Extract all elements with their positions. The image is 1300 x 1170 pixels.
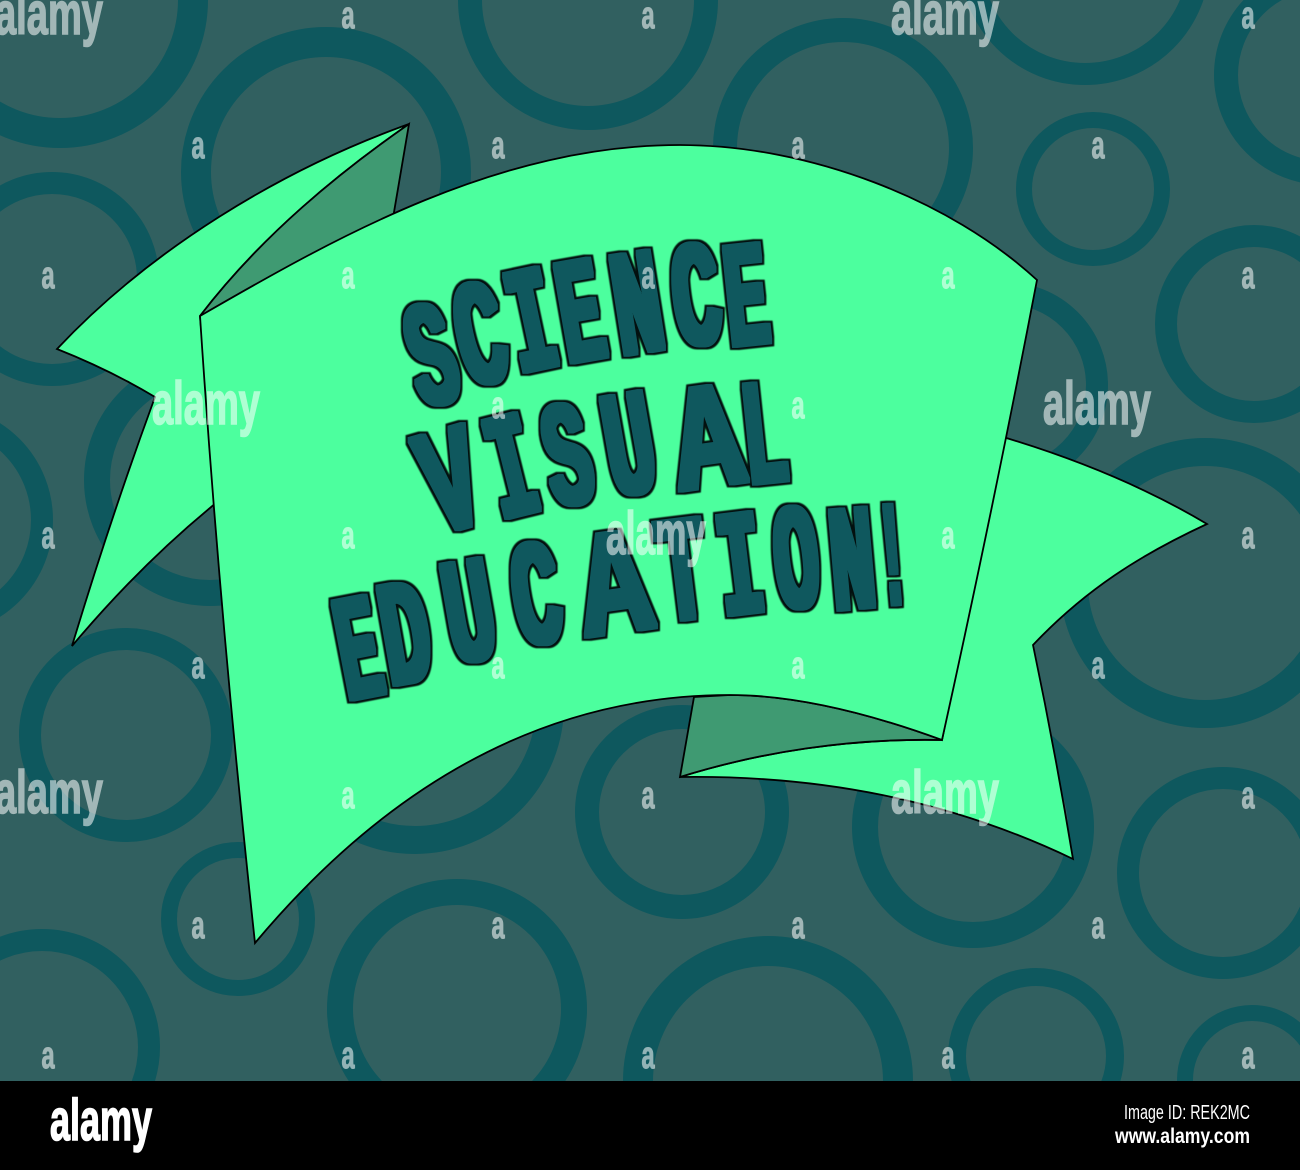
title: Science Visual Education!: A: [663, 358, 754, 536]
footer: alamy logo: alamy: [50, 1088, 152, 1153]
watermark: small repeated letters: a: [191, 123, 205, 166]
watermark: small repeated letters: a: [41, 513, 55, 556]
title: Science Visual Education!: N: [602, 226, 676, 401]
title: Science Visual Education!: A: [569, 504, 662, 682]
watermark: small repeated letters: a: [341, 1033, 355, 1076]
title: Science Visual Education!: [324, 218, 914, 745]
watermark: small repeated letters: a: [641, 773, 655, 816]
watermark: small repeated letters: a: [791, 643, 805, 686]
watermark: small repeated letters: a: [641, 1033, 655, 1076]
footer bar: [0, 1081, 1300, 1170]
title: Science Visual Education!: D: [368, 556, 446, 731]
watermark: small repeated letters: a: [41, 1033, 55, 1076]
title: Science Visual Education!: E: [717, 218, 778, 392]
footer: image id: Image ID: REK2MC: [1124, 1102, 1250, 1124]
footer: website: www.alamy.com: [1114, 1125, 1250, 1148]
watermark: small repeated letters: a: [41, 253, 55, 296]
banner: right back ribbon tail: [680, 437, 1207, 859]
watermark: small repeated letters: a: [491, 123, 505, 166]
banner: main front panel: [200, 145, 1037, 943]
watermark: large repeated wordmarks: alamy: [606, 500, 706, 567]
watermark: small repeated letters: a: [341, 773, 355, 816]
watermark: large repeated wordmarks: alamy: [891, 759, 999, 826]
watermark: small repeated letters: a: [1091, 123, 1105, 166]
watermark: small repeated letters: a: [1091, 643, 1105, 686]
watermark: small repeated letters: a: [791, 383, 805, 426]
watermark: small repeated letters: a: [491, 383, 505, 426]
watermark: small repeated letters: a: [1241, 773, 1255, 816]
watermark: small repeated letters: a: [491, 903, 505, 946]
watermark: small repeated letters: a: [1091, 903, 1105, 946]
title: Science Visual Education!: C: [501, 517, 575, 692]
watermark: small repeated letters: a: [1241, 1033, 1255, 1076]
banner: lower fold shadow: [680, 695, 942, 777]
watermark: large repeated wordmarks: alamy: [152, 370, 260, 437]
watermark: small repeated letters: a: [791, 903, 805, 946]
title: Science Visual Education!: !: [872, 480, 914, 651]
watermark: small repeated letters: a: [191, 903, 205, 946]
title: Science Visual Education!: S: [390, 276, 477, 452]
watermark: small repeated letters: a: [491, 643, 505, 686]
watermark: small repeated letters: a: [791, 123, 805, 166]
banner: left back ribbon tail: [57, 124, 409, 646]
watermark: small repeated letters: a: [941, 253, 955, 296]
watermark: small repeated letters: a: [1241, 513, 1255, 556]
title: Science Visual Education!: E: [324, 571, 397, 745]
title: Science Visual Education!: U: [431, 532, 510, 709]
watermark: small repeated letters: a: [1241, 253, 1255, 296]
title: Science Visual Education!: N: [823, 481, 883, 655]
title: Science Visual Education!: O: [766, 480, 828, 654]
title: Science Visual Education!: C: [663, 218, 732, 392]
watermark: large repeated wordmarks: [0, 0, 1151, 826]
watermark: large repeated wordmarks: alamy: [1043, 370, 1151, 437]
title: Science Visual Education!: I: [471, 387, 556, 563]
title: Science Visual Education!: I: [708, 486, 774, 661]
banner: upper fold shadow: [200, 124, 409, 316]
title: Science Visual Education!: T: [648, 492, 719, 667]
title: Science Visual Education!: E: [546, 234, 618, 408]
title: Science Visual Education!: V: [403, 400, 503, 579]
watermark: small repeated letters: a: [191, 643, 205, 686]
title: Science Visual Education!: U: [591, 365, 670, 542]
watermark: small repeated letters: a: [341, 253, 355, 296]
title: Science Visual Education!: S: [529, 376, 609, 552]
watermark: large repeated wordmarks: alamy: [0, 759, 103, 826]
watermark: small repeated letters: a: [341, 513, 355, 556]
title: Science Visual Education!: C: [440, 256, 525, 432]
title: Science Visual Education!: I: [493, 241, 573, 417]
title: Science Visual Education!: L: [734, 355, 796, 529]
watermark: small repeated letters: a: [941, 1033, 955, 1076]
watermark: small repeated letters: a: [641, 253, 655, 296]
watermark: small repeated letters: a: [941, 513, 955, 556]
